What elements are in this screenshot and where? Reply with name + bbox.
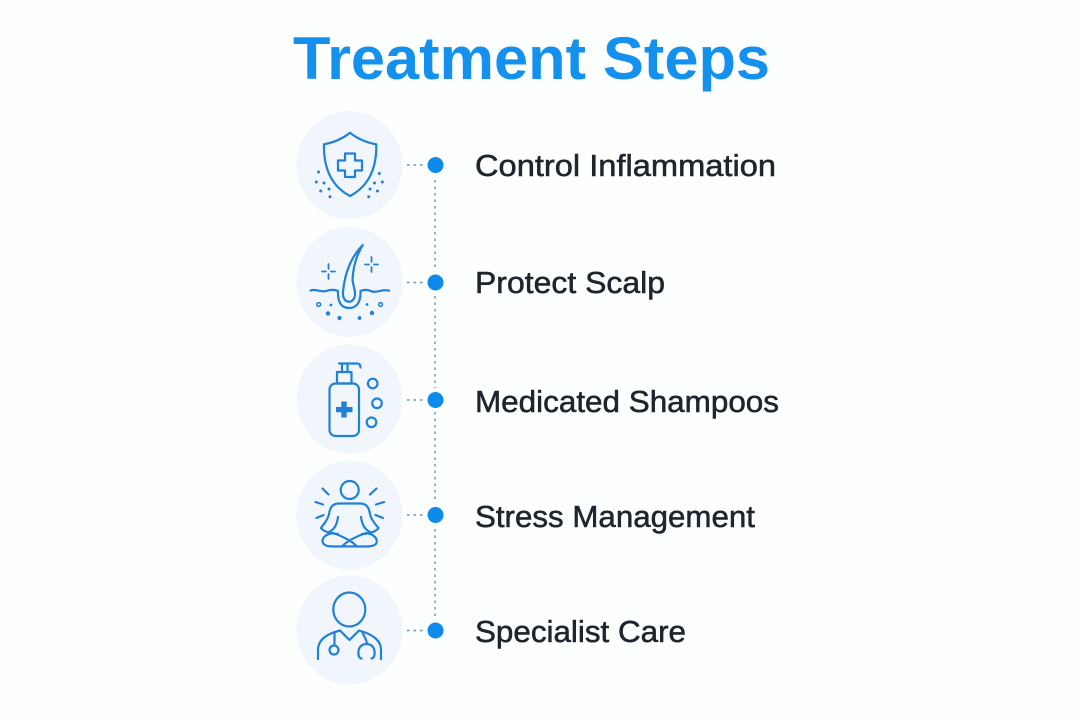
node [428, 157, 444, 173]
label: Stress Management [475, 499, 755, 534]
step 5: specialist care [296, 576, 686, 684]
label: Control Inflammation [475, 148, 776, 183]
node [428, 274, 444, 290]
label: Medicated Shampoos [475, 384, 779, 419]
node [428, 392, 444, 408]
step 1: control inflammation [296, 111, 776, 219]
icon: hair follicle [296, 227, 402, 337]
title: Treatment Steps [293, 24, 770, 92]
node [428, 622, 444, 638]
icon: shield with cross [296, 111, 402, 219]
label: Protect Scalp [475, 265, 665, 300]
icon: doctor with stethoscope [296, 576, 402, 684]
timeline connector [407, 165, 435, 630]
label: Specialist Care [475, 614, 686, 649]
step 2: protect scalp [296, 227, 665, 337]
node [428, 507, 444, 523]
icon: meditating person [296, 460, 402, 570]
icon: shampoo bottle [296, 344, 402, 454]
step 3: medicated shampoos [296, 344, 779, 454]
step 4: stress management [296, 460, 755, 570]
